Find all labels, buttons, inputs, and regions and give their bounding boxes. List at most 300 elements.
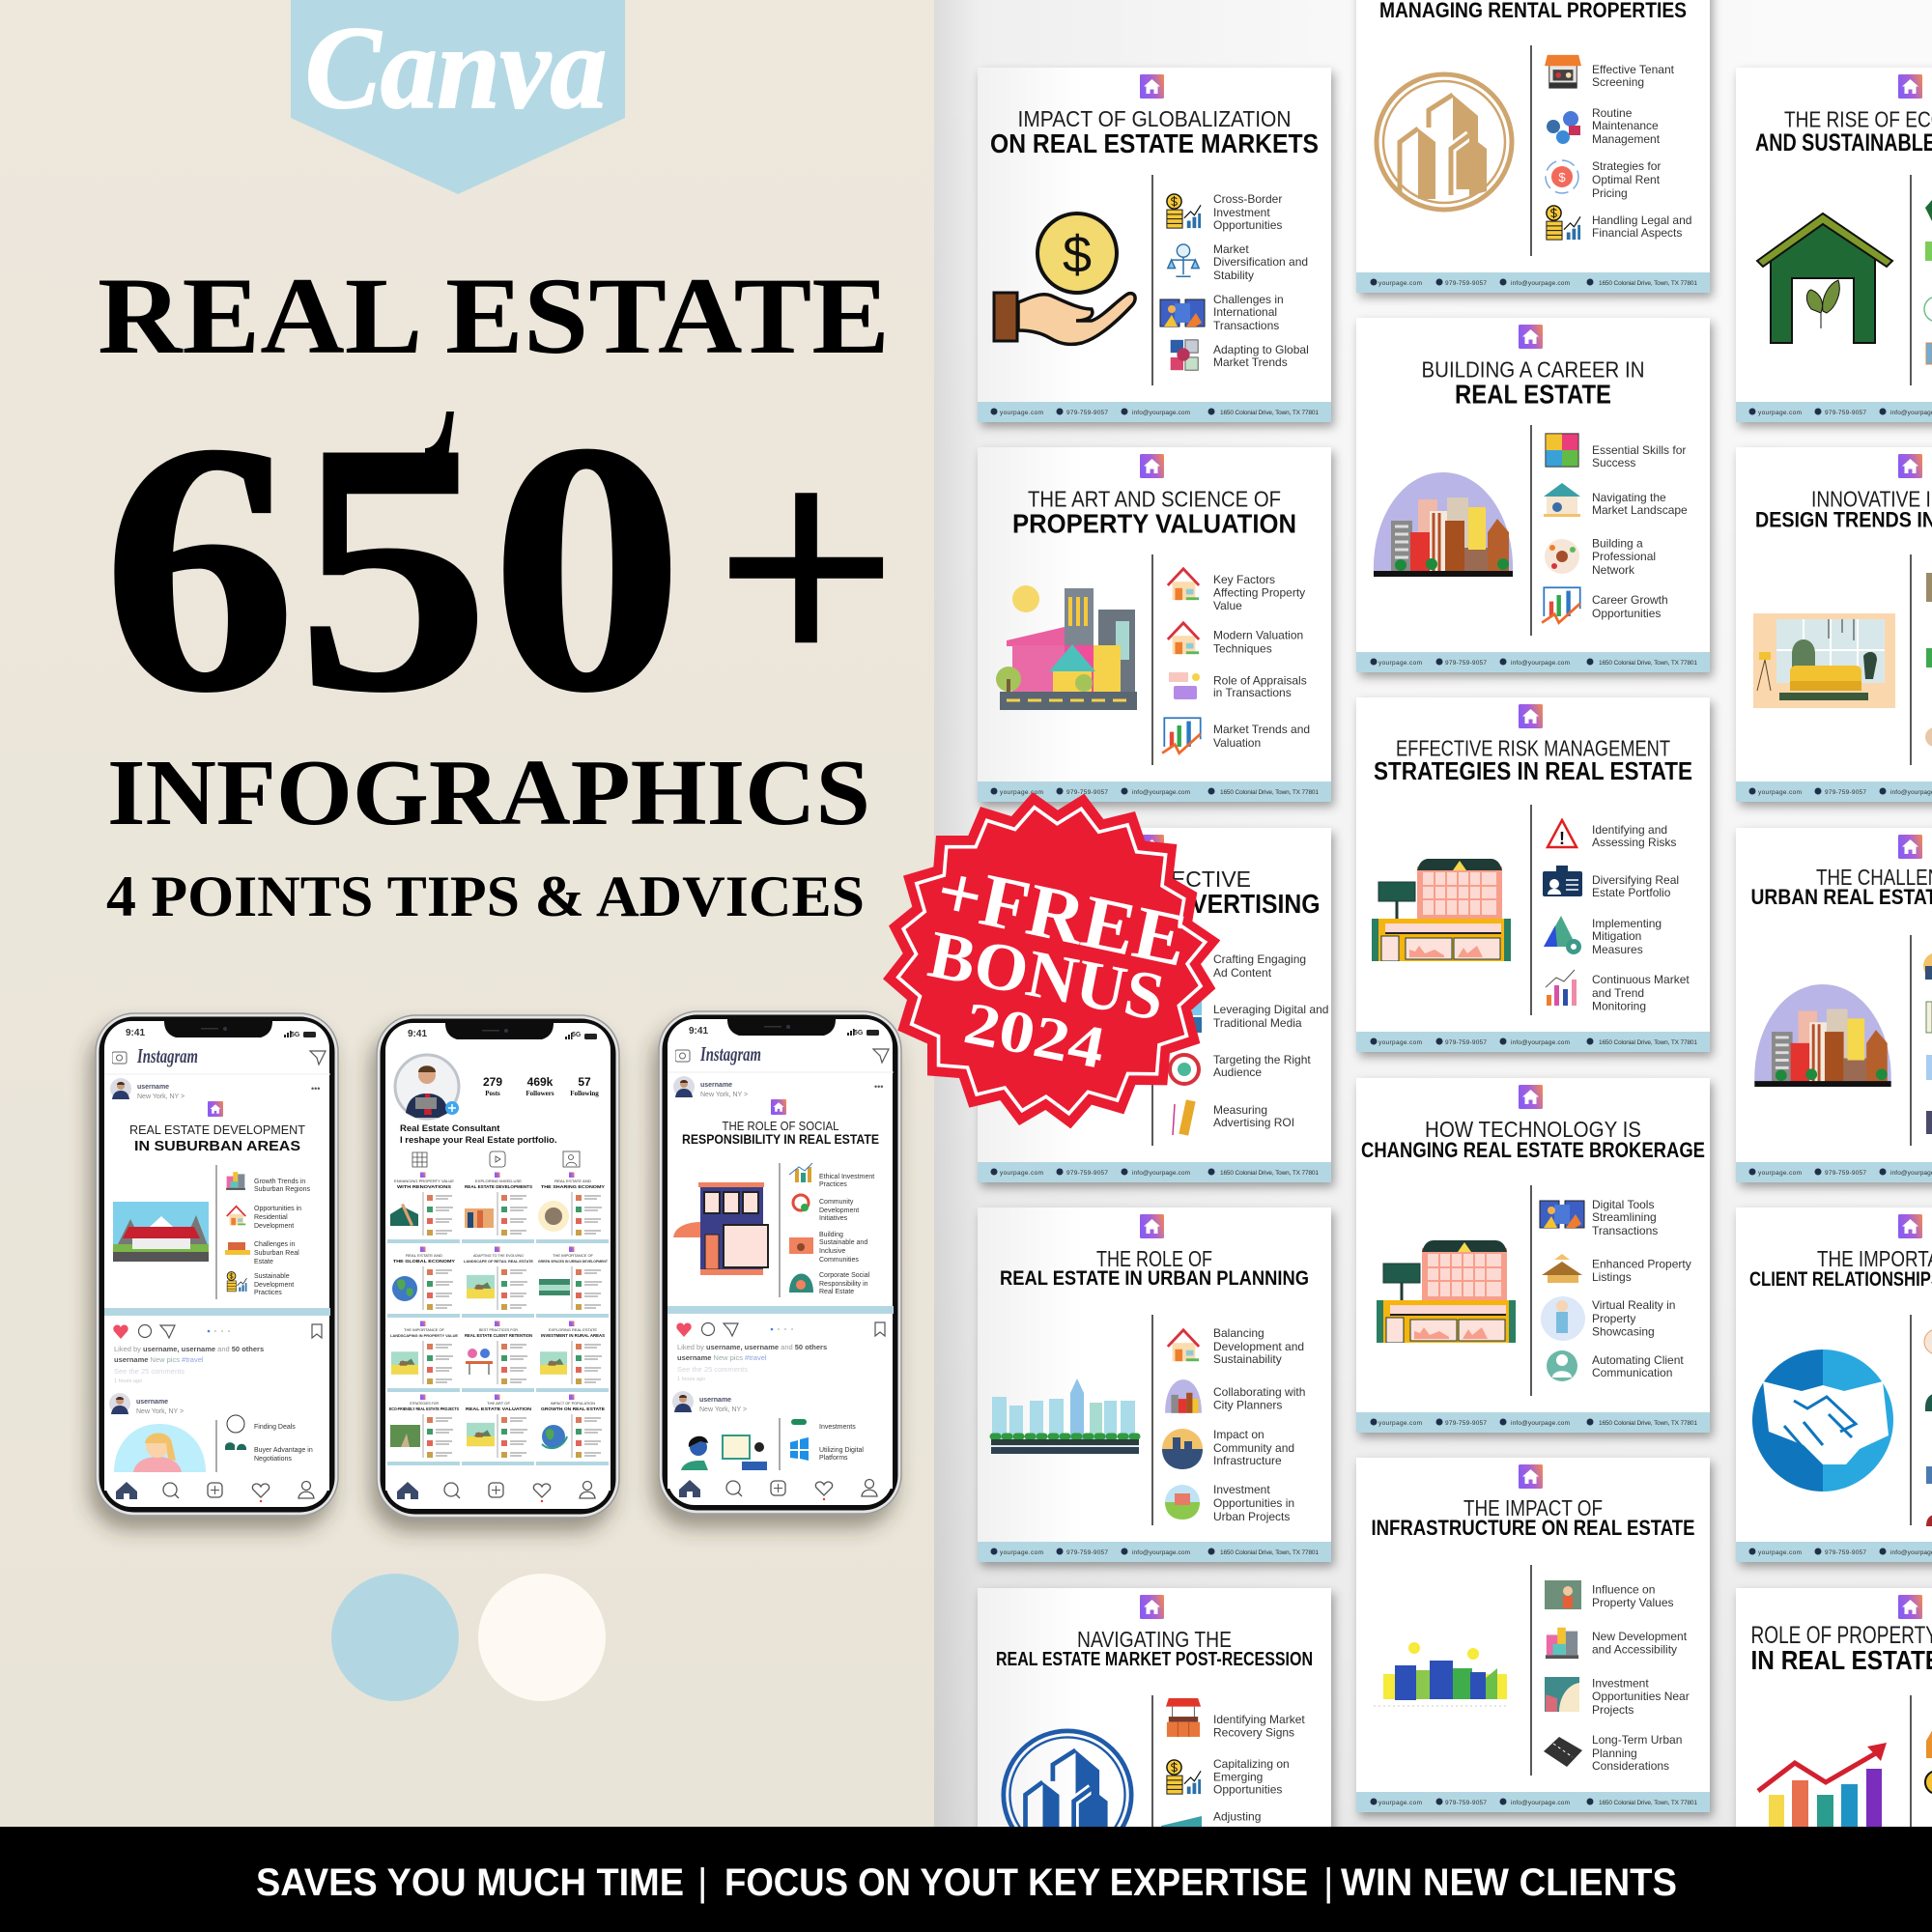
item: Strategies for [1592,159,1661,173]
post grid: BEST PRACTICES FOR [479,1327,518,1332]
badge: free bonus 2024: BONUS [923,918,1170,1036]
item: City Planners [1213,1399,1282,1412]
item: Digital Tools [1592,1198,1654,1211]
post grid: ENHANCING PROPERTY VALUE [394,1179,454,1183]
heading: EFFECTIVE RISK MANAGEMENT [1396,736,1670,761]
item: Adjusting [1213,1810,1261,1824]
post grid: EXPLORING REAL ESTATE [549,1327,597,1332]
phone: feed post suburban: username [136,1399,168,1406]
phone: feed post social responsibility: THE ROLE OF SOCIAL [723,1119,838,1133]
footer [1370,1037,1697,1046]
post grid: GROWTH ON REAL ESTATE [541,1406,605,1411]
post grid: THE GLOBAL ECONOMY [393,1259,455,1264]
item: Measures [1592,943,1643,956]
item [1168,1326,1304,1366]
card: role of property [1736,1588,1932,1932]
colour swatch: blue [331,1574,459,1701]
post grid: GREEN SPACES IN URBAN DEVELOPMENT [538,1259,608,1264]
footer: 979-759-9057 [1445,660,1487,667]
item [1546,1628,1688,1659]
phone: feed post suburban: Instagram [136,1044,198,1067]
phone: feed post social responsibility: username New pics #travel [677,1353,767,1362]
footer: 979-759-9057 [1825,410,1866,416]
phone: feed post suburban: 1 hours ago [114,1378,142,1384]
item: Challenges in [1213,293,1284,306]
item [1213,952,1306,980]
heading [989,867,1320,919]
item: Career Growth [1592,593,1668,607]
item: Sustainability [1213,1352,1282,1366]
footer: 979-759-9057 [1066,1170,1108,1177]
heading [1374,736,1692,785]
illustration: storefront [1377,1240,1516,1343]
item: Essential Skills for [1592,443,1686,457]
post grid: THE ART OF [487,1401,511,1406]
phone: profile grid [377,1015,619,1518]
item: Community and [1213,1441,1294,1455]
heading: THE ROLE OF [1096,1246,1212,1271]
post grid: THE IMPORTANCE OF [404,1327,445,1332]
footer: yourpage.com [1000,1549,1043,1556]
item: Professional [1592,550,1656,563]
item [1547,106,1661,146]
illustration: city dome [1374,472,1513,577]
item [1171,340,1309,370]
item icons cut off [1924,1329,1932,1526]
item [1542,1254,1691,1284]
card: managing rental properties [1356,0,1710,293]
item [1548,820,1676,849]
subheading: 4 points tips and advices: 4 POINTS TIPS & ADVICES [106,865,865,928]
card: innovative interior design [1736,447,1932,802]
card: effective advertising [978,828,1331,1182]
footer: yourpage.com [1000,410,1043,416]
heading [1422,357,1644,410]
footer [991,408,1319,416]
footer: yourpage.com [1000,1170,1043,1177]
item [1166,1698,1305,1739]
item: Market Trends and [1213,723,1310,736]
footer: 979-759-9057 [1825,1549,1866,1556]
profile avatar [395,1055,459,1119]
footer: yourpage.com [1378,660,1422,667]
footer: info@yourpage.com [1511,1800,1570,1806]
item [1168,242,1308,282]
item: Emerging [1213,1770,1263,1783]
heading [996,1627,1313,1670]
post grid: INVESTMENT IN RURAL AREAS [541,1333,605,1338]
item [1543,866,1679,899]
item: Leveraging Digital and [1213,1003,1328,1016]
heading: PROPERTY VALUATION [1012,508,1296,539]
item: Network [1592,563,1635,577]
footer: 979-759-9057 [1066,789,1108,796]
bottom bar: tagline [0,1827,1932,1932]
phone: profile grid: 9:41 [408,1029,427,1039]
footer: 1650 Colonial Drive, Town, TX 77801 [1220,789,1319,796]
phone: feed post social responsibility: Practices [819,1181,847,1188]
item: Management [1592,132,1661,146]
footer: info@yourpage.com [1132,1549,1190,1556]
phone: feed post suburban: IN SUBURBAN AREAS [134,1138,300,1154]
item icons cut off [1924,200,1932,364]
phone: feed post suburban: username [137,1084,169,1091]
item [1165,1379,1305,1413]
illustration: colourful city [996,585,1137,710]
item: Maintenance [1592,119,1659,132]
phone: feed post suburban: New York, NY > [137,1094,185,1100]
background: right gallery [934,0,1932,1932]
heading [1372,1495,1694,1540]
item [1540,1198,1658,1237]
banner: Canva ribbon: Canva [305,3,607,133]
card: technology and brokerage [1356,1078,1710,1433]
phone: feed post suburban: 9:41 [126,1028,145,1038]
item: Routine [1592,106,1632,120]
item: Capitalizing on [1213,1757,1290,1771]
bottom bar: tagline: WIN NEW CLIENTS [1341,1861,1677,1904]
item: and Accessibility [1592,1643,1677,1657]
footer: 1650 Colonial Drive, Town, TX 77801 [1599,1420,1697,1427]
phone: feed post suburban: Sustainable [254,1273,290,1280]
heading: NAVIGATING THE [1077,1627,1232,1652]
item: Infrastructure [1213,1454,1282,1467]
footer: yourpage.com [1378,1039,1422,1046]
footer: yourpage.com [1378,1800,1422,1806]
phone: feed post social responsibility: Sustainable and [819,1239,867,1246]
phone: feed post social responsibility: Liked by username, username and 50 others [677,1343,827,1351]
heading: REAL ESTATE IN URBAN PLANNING [1000,1267,1309,1290]
item: Advertising ROI [1213,1116,1294,1129]
post grid: ADAPTING TO THE EVOLVING [473,1253,524,1258]
item: Market Landscape [1592,503,1688,517]
item: Handling Legal and [1592,213,1691,227]
heading [1750,1622,1932,1675]
phone: feed post suburban: username New pics #travel [114,1355,204,1364]
item: Key Factors [1213,573,1275,586]
bottom bar: tagline: SAVES YOU MUCH TIME [256,1861,684,1904]
illustration: rising bar chart [1758,1743,1887,1853]
phone: feed post social responsibility: Community [819,1199,853,1206]
item: Opportunities Near [1592,1690,1690,1703]
footer: yourpage.com [1758,789,1802,796]
phone: feed post social responsibility: Investments [819,1424,856,1431]
phone: feed post social responsibility: Initiatives [819,1215,848,1222]
post grid [387,1170,609,1466]
phone: feed post social responsibility: Responsibility in [819,1281,868,1288]
badge: free bonus 2024 [883,792,1220,1128]
phone: feed post social responsibility: Corporate Social [819,1272,869,1279]
post grid: WITH RENOVATIONS [397,1184,451,1189]
item: and Trend [1592,986,1644,1000]
post grid: REAL ESTATE CLIENT RETENTION [465,1333,532,1338]
phone: feed post suburban: Buyer Advantage in [254,1447,313,1454]
phone: feed post suburban: New York, NY > [136,1408,184,1415]
footer: 979-759-9057 [1445,280,1487,287]
item: Screening [1592,75,1644,89]
phone: feed post suburban: Negotiations [254,1456,292,1463]
footer [1748,788,1932,796]
footer: 979-759-9057 [1445,1420,1487,1427]
heading: HOW TECHNOLOGY IS [1425,1117,1641,1142]
phone: feed post social responsibility: Building [819,1232,843,1238]
item: Cross-Border [1213,192,1282,206]
footer: 1650 Colonial Drive, Town, TX 77801 [1220,410,1319,416]
phone: feed post social responsibility: 5G [854,1030,864,1037]
badge: free bonus 2024: 2024 [959,990,1110,1082]
item [1547,206,1691,240]
item: Opportunities [1213,1783,1282,1797]
heading [1000,1246,1309,1290]
post grid: REAL ESTATE AND [554,1179,591,1183]
footer: yourpage.com [1378,280,1422,287]
item: Targeting the Right [1213,1053,1311,1066]
item [1544,1733,1682,1773]
item [1545,537,1656,577]
post grid: EXPLORING MIXED-USE [475,1179,522,1183]
heading: 650+: + [717,396,895,738]
bottom bar: tagline: FOCUS ON YOUT KEY EXPERTISE [724,1861,1308,1904]
item [1168,569,1305,612]
item: Audience [1213,1065,1262,1079]
card: building a career [1356,318,1710,672]
item: New Development [1592,1630,1687,1643]
item icons cut off [1925,1729,1932,1794]
heading [1361,1117,1705,1162]
footer: yourpage.com [1758,410,1802,416]
footer: 1650 Colonial Drive, Town, TX 77801 [1220,1170,1319,1177]
footer: yourpage.com [1378,1420,1422,1427]
item [1165,1483,1294,1523]
footer [991,1169,1319,1177]
item: Adapting to Global [1213,343,1309,356]
footer [1748,408,1932,416]
item: Mitigation [1592,929,1641,943]
item: Opportunities in [1213,1496,1294,1510]
phone: feed post social responsibility: RESPONSIBILITY IN REAL ESTATE [682,1132,879,1147]
footer: 1650 Colonial Drive, Town, TX 77801 [1599,1800,1697,1806]
phone: feed post social responsibility: Platforms [819,1455,848,1462]
post grid: IMPACT OF POPULATION [551,1401,595,1406]
item: International [1213,305,1277,319]
item [1546,159,1661,200]
footer [1370,1418,1697,1427]
profile stats: Followers [526,1090,554,1097]
bottom bar: tagline: | [1323,1861,1333,1904]
item: Pricing [1592,186,1628,200]
item: Investment [1592,1676,1649,1690]
footer: yourpage.com [1000,789,1043,796]
profile stats: 279 [483,1075,502,1089]
phone: feed post social responsibility: Ethical Investment [819,1174,874,1180]
heading: CHANGING REAL ESTATE BROKERAGE [1361,1138,1705,1162]
footer: 1650 Colonial Drive, Town, TX 77801 [1599,660,1697,667]
footer [1370,278,1697,287]
item [1170,1053,1311,1084]
heading [1755,106,1932,156]
heading [1755,487,1932,532]
heading: BUILDING A CAREER IN [1422,357,1644,383]
illustration: city dome [1754,984,1891,1087]
phone: feed post social responsibility: Instagram [699,1042,761,1065]
post grid: REAL ESTATE VALUATION [466,1406,531,1411]
illustration: blue ring logo [1004,1731,1131,1859]
item: Streamlining [1592,1210,1657,1224]
illustration: living room [1753,613,1895,708]
item: Collaborating with [1213,1385,1305,1399]
item: $ [1558,170,1566,185]
phone: profile grid: 5G [572,1032,582,1038]
illustration: green house [1757,213,1892,343]
card: risk management [1356,697,1710,1052]
post grid: STRATEGIES FOR [410,1401,439,1406]
item: Crafting Engaging [1213,952,1306,966]
card: rise of eco friendly [1736,68,1932,422]
footer: info@yourpage.com [1132,1170,1190,1177]
heading [1012,487,1296,539]
phone: feed post suburban [96,1013,338,1516]
footer [1748,1548,1932,1556]
phone: feed post social responsibility: Communities [819,1257,859,1264]
phone: feed post social responsibility [659,1011,901,1514]
post grid: LANDSCAPING IN PROPERTY VALUE [390,1333,458,1338]
phone: feed post social responsibility: 1 hours ago [677,1377,705,1382]
profile stats: Posts [485,1090,500,1097]
post grid: ECO-FRIENDLY REAL ESTATE PROJECTS [389,1406,459,1411]
footer: info@yourpage.com [1511,280,1570,287]
footer: 1650 Colonial Drive, Town, TX 77801 [1220,1549,1319,1556]
illustration: skyline [991,1378,1139,1454]
footer: 1650 Colonial Drive, Town, TX 77801 [1599,1039,1697,1046]
phone: feed post social responsibility: username [700,1082,732,1089]
phone: feed post suburban: Estate [254,1259,273,1265]
footer: yourpage.com [1758,1549,1802,1556]
item [1544,916,1662,956]
card: infrastructure impact [1356,1458,1710,1812]
item [1169,672,1307,699]
item: in Transactions [1213,686,1292,699]
item [1192,1000,1328,1033]
phone: feed post suburban: REAL ESTATE DEVELOPMENT [129,1122,305,1137]
item: Navigating the [1592,491,1666,504]
phone: feed post suburban: Suburban Regions [254,1186,310,1193]
footer: 1650 Colonial Drive, Town, TX 77801 [1599,280,1697,287]
card: impact of globalization [978,68,1331,422]
heading [1749,1246,1932,1291]
heading: REAL ESTATE [1455,379,1611,410]
item: Diversifying Real [1592,873,1679,887]
item: Traditional Media [1213,1016,1302,1030]
item: Communication [1592,1366,1672,1379]
item [1173,1099,1294,1136]
phone: feed post social responsibility: Development [819,1208,859,1214]
item [1168,623,1303,655]
phone: feed post social responsibility: username [699,1397,731,1404]
bottom bar: tagline: | [697,1861,707,1904]
item: Building a [1592,537,1643,551]
profile bio: Real Estate Consultant [400,1123,499,1134]
post grid: THE IMPORTANCE OF [553,1253,594,1258]
item: Affecting Property [1213,585,1305,599]
phone: feed post suburban: ••• [311,1084,320,1094]
profile stats [483,1075,599,1097]
phone: feed post social responsibility: 9:41 [689,1026,708,1037]
item: Ad Content [1213,966,1272,980]
footer: 979-759-9057 [1445,1039,1487,1046]
item: Implementing [1592,917,1662,930]
item: Projects [1592,1703,1634,1717]
item: Property Values [1592,1596,1673,1609]
heading: IMPACT OF GLOBALIZATION [1018,106,1291,131]
item: Effective Tenant [1592,63,1674,76]
item [1545,1676,1690,1717]
footer [1370,1799,1697,1806]
phone: feed post suburban: Development [254,1223,294,1230]
item: Valuation [1213,736,1261,750]
card: post recession [978,1588,1331,1932]
profile stats: Following [570,1090,599,1097]
item: Diversification and [1213,255,1308,269]
phone: feed post social responsibility: New York, NY > [699,1406,747,1413]
item: Urban Projects [1213,1510,1290,1523]
item [1545,1580,1673,1609]
phone: feed post suburban: Opportunities in [254,1206,301,1212]
heading: ON REAL ESTATE MARKETS [990,128,1319,158]
item: Value [1213,599,1242,612]
item: Investment [1213,206,1270,219]
item: Identifying and [1592,823,1667,837]
item: Transactions [1213,319,1279,332]
phone: feed post suburban: See the 25 comments [114,1367,185,1376]
item: Influence on [1592,1582,1655,1596]
footer: info@yourpage.com [1511,660,1570,667]
item: Showcasing [1592,1325,1655,1339]
item: Long-Term Urban [1592,1733,1682,1747]
item: Listings [1592,1270,1632,1284]
heading [1750,865,1932,909]
post grid: REAL ESTATE DEVELOPMENTS [465,1184,532,1189]
footer: 979-759-9057 [1825,1170,1866,1177]
heading: REAL ESTATE: REAL ESTATE [98,256,890,377]
item [1546,970,1690,1012]
item: Opportunities [1592,607,1661,620]
item: Recovery Signs [1213,1725,1294,1739]
card: property valuation [978,447,1331,802]
footer: 979-759-9057 [1445,1800,1487,1806]
item [1160,293,1284,332]
footer: 979-759-9057 [1066,410,1108,416]
item: Investment [1213,1483,1270,1496]
heading: REAL ESTATE MARKET POST-RECESSION [996,1649,1313,1670]
item: Estate Portfolio [1592,886,1671,899]
item: Transactions [1592,1224,1658,1237]
item: Virtual Reality in [1592,1298,1675,1312]
item: Enhanced Property [1592,1258,1691,1271]
phone: feed post suburban: 5G [291,1032,300,1038]
item: Financial Aspects [1592,226,1682,240]
badge: free bonus 2024: +FREE [929,847,1195,982]
phone: feed post social responsibility: New York, NY > [700,1092,748,1098]
phone: feed post suburban: Growth Trends in [254,1179,305,1185]
item: Considerations [1592,1759,1669,1773]
footer: 979-759-9057 [1066,1549,1108,1556]
profile stats: 469k [527,1075,554,1089]
card: importance of client relationships [1736,1208,1932,1562]
item: Measuring [1213,1103,1267,1117]
item icons cut off [1925,573,1932,747]
item [1544,483,1688,517]
phone: feed post suburban: Development [254,1282,294,1289]
